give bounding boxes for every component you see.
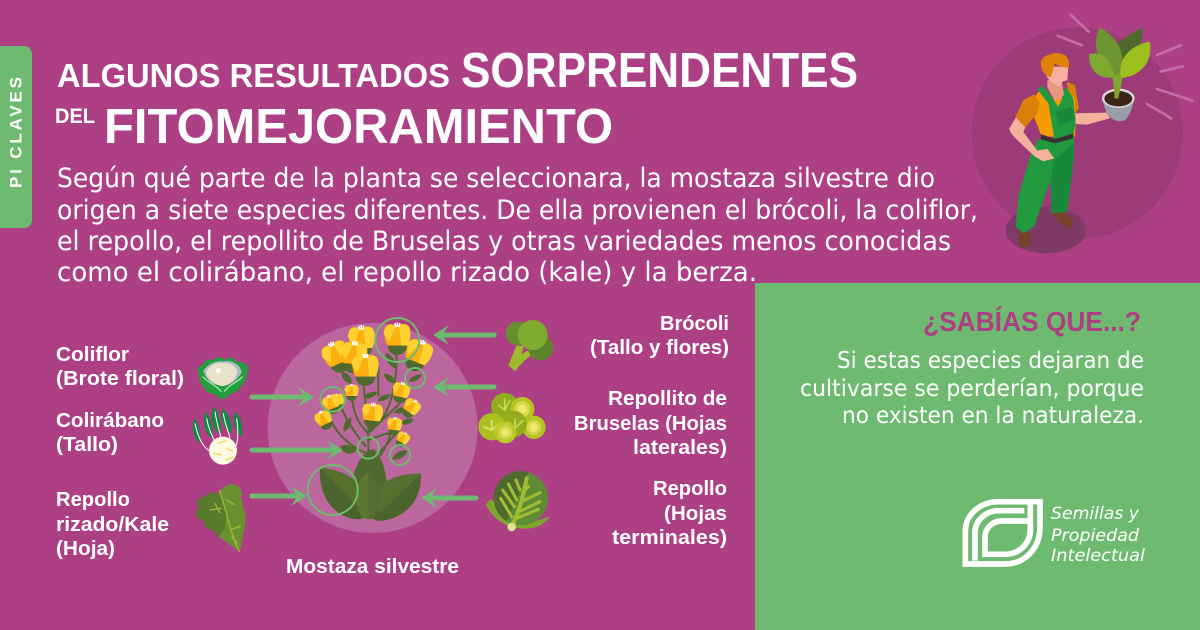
icon: cauliflower: [197, 357, 248, 399]
labels: left column: Colirábano: [56, 410, 164, 432]
callout text: no existen en la naturaleza.: [842, 401, 1144, 429]
icon: kale leaf: [196, 484, 246, 552]
labels: right column: Brócoli: [660, 313, 729, 335]
labels: right column: (Tallo y flores): [590, 337, 729, 359]
illustration: gardener holding a potted plant: [972, 15, 1192, 253]
labels: right column: [574, 313, 729, 549]
labels: right column: laterales): [633, 437, 727, 459]
intro text block: el repollo, el repollito de Bruselas y otras variedades menos conocidas: [57, 226, 951, 257]
leaves: [340, 353, 422, 460]
icon: kohlrabi: [193, 407, 242, 465]
title: [55, 44, 858, 154]
heading: ¿Sabías que?: ¿SABÍAS QUE...?: [923, 306, 1141, 337]
logo: Semillas y Propiedad Intelectual: [965, 502, 1145, 566]
callout text: [800, 346, 1144, 429]
title: ALGUNOS RESULTADOS: [57, 57, 450, 94]
callout text: cultivarse se perderían, porque: [800, 374, 1144, 402]
labels: right column: Repollo: [653, 478, 727, 500]
logo: Semillas y Propiedad Intelectual: Semillas y: [1051, 504, 1140, 524]
panel: ¿Sabías que?: [755, 283, 1200, 630]
labels: left column: rizado/Kale: [56, 514, 169, 536]
highlight rings: [308, 318, 425, 515]
labels: left column: Coliflor: [56, 344, 129, 366]
logo: Semillas y Propiedad Intelectual: Intelectual: [1051, 546, 1145, 566]
intro text block: [57, 163, 978, 288]
panel: PI Claves tab: PI CLAVES: [6, 77, 26, 188]
labels: right column: (Hojas: [664, 503, 727, 525]
labels: right column: terminales): [612, 527, 727, 549]
chart: mustard plant with highlighted parts: [268, 318, 478, 533]
title: SORPRENDENTES: [461, 44, 858, 98]
labels: left column: [56, 344, 184, 560]
title: FITOMEJORAMIENTO: [104, 100, 613, 154]
labels: left column: (Tallo): [56, 434, 118, 456]
intro text block: origen a siete especies diferentes. De ella provienen el brócoli, la coliflor,: [57, 195, 978, 226]
labels: right column: Bruselas (Hojas: [574, 413, 727, 435]
intro text block: como el colirábano, el repollo rizado (kale) y la berza.: [57, 257, 757, 288]
labels: right column: Repollito de: [608, 388, 727, 410]
title: DEL: [55, 105, 95, 128]
icon: cabbage: [486, 471, 550, 531]
arrows: [250, 325, 496, 508]
base leaves: [353, 449, 387, 517]
panel: PI Claves tab: [0, 46, 32, 228]
logo: Semillas y Propiedad Intelectual: Propiedad: [1051, 526, 1139, 546]
stems: [332, 355, 400, 470]
callout text: Si estas especies dejaran de: [837, 346, 1144, 374]
labels: left column: (Hoja): [56, 538, 115, 560]
label: Mostaza silvestre: Mostaza silvestre: [286, 556, 459, 578]
icon: brussels sprouts: [478, 393, 546, 443]
labels: left column: (Brote floral): [56, 368, 184, 390]
intro text block: Según qué parte de la planta se seleccionara, la mostaza silvestre dio: [57, 163, 935, 194]
icon: broccoli: [506, 320, 553, 371]
flowers: [312, 322, 436, 449]
labels: left column: Repollo: [56, 489, 130, 511]
